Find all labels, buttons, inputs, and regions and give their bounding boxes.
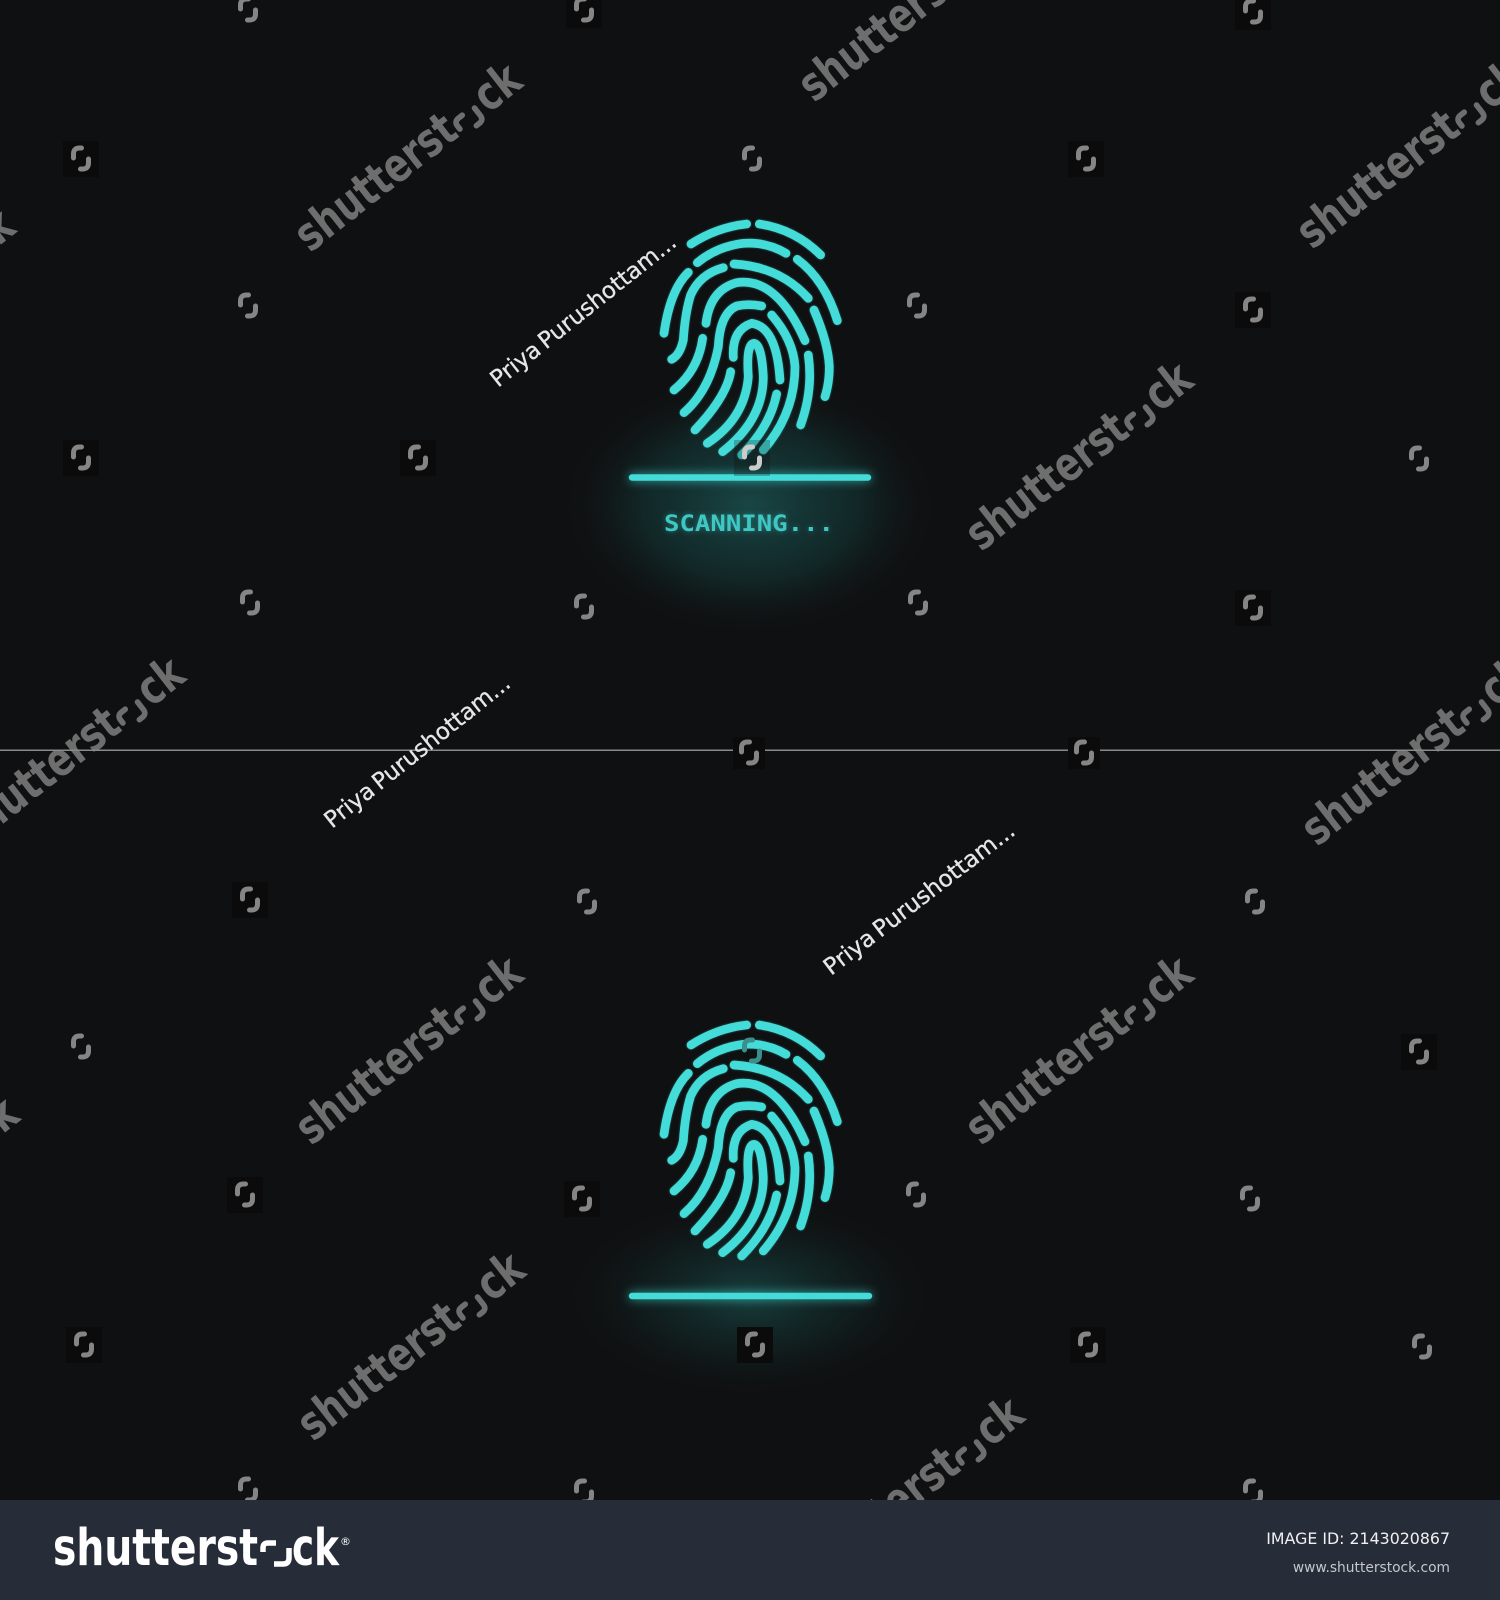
shutterstock watermarks: shutterst: [955, 995, 1139, 1156]
icon: top fingerprint: [664, 224, 837, 455]
image id: IMAGE ID: 2143020867: [1266, 1529, 1450, 1548]
shutterstock watermarks: shutterst: [955, 401, 1139, 562]
footer logo: ck: [292, 1519, 340, 1578]
shutterstock watermarks: shutterst: [287, 1291, 471, 1452]
footer logo: ®: [340, 1535, 351, 1548]
footer bar: [0, 1500, 1500, 1600]
bottom scan line: [632, 1293, 869, 1299]
shutterstock watermarks: shutterst: [284, 102, 468, 263]
glow: bottom scanner: [555, 1191, 945, 1401]
top scan line: [632, 474, 868, 481]
shutterstock watermarks: ck: [463, 944, 534, 1016]
contributor credit 3: Priya Purushottam...: [819, 818, 1020, 981]
shutterstock watermarks: shutterst: [786, 1436, 970, 1597]
contributor credit 2: Priya Purushottam...: [320, 670, 516, 834]
website: www.shutterstock.com: [1293, 1560, 1450, 1576]
shutterstock watermarks: ck: [125, 645, 196, 717]
shutterstock watermarks: ck: [964, 1385, 1035, 1457]
icon: watermark over top fingerprint: [734, 440, 770, 476]
shutterstock watermarks: ck: [462, 51, 533, 123]
scanning label: SCANNING...: [664, 512, 834, 537]
divider line: [0, 750, 1500, 751]
shutterstock watermarks: ck: [465, 1240, 536, 1312]
footer logo: shutterst: [53, 1519, 258, 1578]
glow: top scanner: [555, 370, 945, 640]
contributor credit 1: Priya Purushottam...: [486, 229, 682, 393]
shutterstock watermarks: ck: [1133, 350, 1204, 422]
icon: watermark over bottom fingerprint: [744, 1040, 760, 1061]
shutterstock watermarks: ck: [1133, 944, 1204, 1016]
shutterstock watermarks: shutterst: [285, 995, 469, 1156]
icon: bottom fingerprint: [664, 1025, 837, 1256]
